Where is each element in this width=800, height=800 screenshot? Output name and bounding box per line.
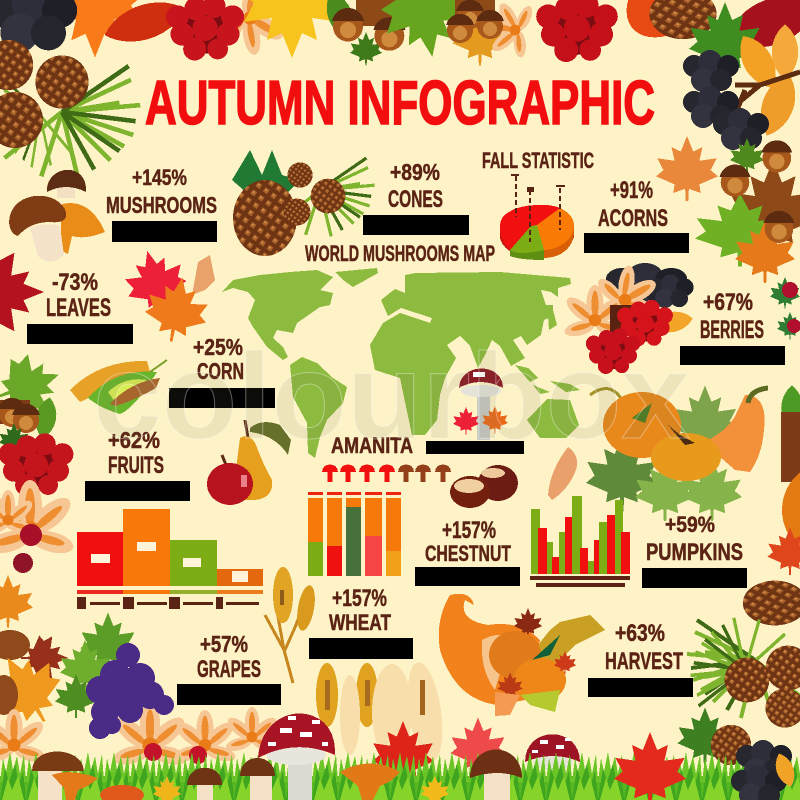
mushrooms stat: +145% — [132, 165, 187, 190]
icon: maple leaf — [614, 732, 686, 800]
icon: orange leaf — [0, 640, 75, 739]
icon: pale leaves — [0, 480, 76, 573]
leaves stat — [27, 269, 133, 344]
harvest stat — [588, 620, 693, 697]
harvest stat: +63% — [615, 620, 665, 647]
icon: mushroom — [240, 758, 275, 800]
mushroom pictogram row — [322, 464, 451, 482]
icon: pear and apple — [207, 420, 291, 505]
world map — [222, 268, 580, 458]
icon: pine cones with needles — [232, 150, 374, 256]
icon: dark green leaf — [730, 138, 764, 174]
icon: acorns — [446, 0, 504, 43]
icon: chanterelle — [340, 764, 400, 800]
icon: green leaf — [689, 2, 761, 78]
cones stat: CONES — [388, 186, 443, 213]
cones stat: +89% — [390, 159, 440, 185]
fall statistic heading: FALL STATISTIC — [482, 148, 594, 173]
border: left cluster — [0, 40, 140, 765]
harvest stat: HARVEST — [605, 648, 683, 675]
icon: wheat — [265, 567, 318, 683]
chestnut stat: CHESTNUT — [425, 541, 511, 566]
leaves stat: LEAVES — [46, 294, 111, 322]
wheat stat: +157% — [332, 585, 387, 612]
icon: chestnuts — [450, 465, 518, 508]
icon: green leaf — [781, 386, 800, 430]
leaves stat: -73% — [52, 269, 98, 296]
icon: red leaf — [99, 0, 191, 52]
icon: acorn — [0, 675, 18, 715]
icon: orange leaf — [0, 575, 33, 628]
icon: red berries — [0, 433, 73, 496]
mushrooms stat — [106, 165, 217, 242]
wheat stat: WHEAT — [329, 610, 391, 635]
icon: pine cones — [725, 646, 800, 728]
icon: red leaf — [0, 251, 44, 333]
chestnut stat: +157% — [442, 517, 496, 544]
icon: red leaf — [768, 528, 800, 575]
icon: autumn leaves — [118, 243, 215, 347]
icon: yellow leaf — [421, 776, 449, 800]
icon: cornucopia — [439, 594, 605, 716]
border: bottom meadow — [0, 660, 800, 800]
acorns stat — [584, 177, 689, 253]
icon: black berries — [683, 50, 769, 150]
icon: dark red leaf — [21, 636, 68, 680]
icon: black berries — [731, 740, 792, 800]
border: top garland — [0, 0, 800, 78]
icon: orange leaves — [452, 7, 508, 65]
icon: yellow maple leaf — [242, 0, 342, 58]
wheat stat — [309, 585, 413, 659]
icon: pine needles — [687, 620, 800, 718]
icon: pine cone — [711, 725, 751, 765]
icon: green leaf — [0, 345, 70, 426]
fruits stat — [85, 427, 190, 501]
world map heading: WORLD MUSHROOMS MAP — [305, 241, 495, 266]
acorns stat: ACORNS — [598, 205, 668, 232]
icon: acorns — [332, 0, 406, 51]
corn stat — [169, 334, 275, 408]
icon: chanterelle — [52, 772, 98, 800]
icon: pine needles — [5, 66, 140, 179]
grapes stat: GRAPES — [197, 656, 261, 683]
icon: rowan berries and leaves — [563, 254, 694, 374]
icon: amanita mushroom with leaves — [453, 368, 508, 440]
icon: pine needles — [691, 618, 785, 706]
icon: dark red leaf — [720, 0, 800, 60]
icon: dark leaf — [0, 423, 29, 454]
berries stat — [680, 289, 785, 365]
icon: red leaf — [100, 785, 144, 800]
watermark: colourbox — [93, 328, 690, 464]
icon: acorn — [0, 630, 30, 660]
icon: orange leaf — [47, 0, 142, 58]
fruits stat: FRUITS — [108, 452, 164, 479]
berries stat: +67% — [703, 289, 753, 316]
icon: yellow leaf — [772, 24, 798, 80]
icon: branch — [720, 72, 800, 118]
icon: rowan berries — [166, 0, 244, 61]
chestnut stat — [415, 517, 520, 586]
icon: blurred red leaf — [450, 718, 506, 775]
icon: orange flower leaf — [656, 136, 718, 201]
icon: amanita mushroom — [258, 713, 335, 800]
icon: acorns — [0, 398, 40, 433]
corn stat: CORN — [197, 358, 244, 384]
icon: pale leaf — [481, 0, 536, 60]
acorns stat: +91% — [610, 177, 653, 204]
icon: wheat field — [316, 660, 448, 764]
icon: orange leaf — [771, 751, 799, 789]
icon: orange leaves — [731, 29, 785, 95]
icon: mushroom — [470, 750, 522, 800]
icon: pale leaf — [215, 0, 300, 67]
icon: green leaf — [678, 708, 732, 765]
icon: orange leaf — [752, 69, 800, 141]
icon: pale leaf — [0, 709, 47, 765]
icon: red berries — [536, 0, 618, 62]
icon: red-orange leaf — [615, 0, 681, 49]
pumpkins stat — [642, 512, 747, 588]
border: right cluster — [656, 24, 800, 765]
bar chart — [77, 509, 263, 609]
icon: pale leaves — [111, 702, 280, 768]
icon: green leaf — [320, 0, 360, 43]
amanita stat — [331, 433, 524, 458]
icon: red leaf — [372, 721, 434, 786]
icon: grapes — [55, 612, 174, 739]
corn stat: +25% — [193, 334, 243, 360]
icon: mushroom — [187, 768, 222, 800]
icon: green leaf — [375, 0, 474, 64]
mushrooms stat: MUSHROOMS — [106, 192, 217, 218]
icon: mushrooms — [9, 170, 105, 262]
fruits stat: +62% — [108, 427, 160, 453]
icon: pine cones — [0, 40, 89, 148]
chart legend — [77, 597, 259, 609]
icon: pine cone — [743, 581, 800, 625]
icon: holly berries — [770, 277, 800, 339]
pumpkins stat: +59% — [665, 512, 715, 537]
pumpkins stat: PUMPKINS — [646, 539, 743, 566]
icon: blurred leaf — [548, 447, 577, 500]
icon: black berries — [0, 0, 77, 52]
grass — [0, 752, 800, 800]
icon: brown basket — [781, 412, 800, 482]
stacked bar chart — [308, 492, 401, 576]
icon: orange leaf — [735, 220, 795, 283]
icon: pine needles — [0, 79, 70, 167]
icon: green leaf — [32, 396, 60, 440]
icon: mushroom — [32, 752, 84, 800]
icon: dark leaf — [350, 32, 382, 66]
icon: acorns — [720, 140, 794, 243]
grapes stat: +57% — [200, 631, 248, 657]
icon: green leaf — [695, 193, 785, 266]
icon: orange leaf — [782, 472, 800, 548]
grapes stat — [177, 631, 281, 705]
icon: amanita mushroom — [525, 734, 580, 770]
cones stat — [363, 159, 469, 235]
icon: brown leaves — [728, 160, 800, 254]
icon: corn — [70, 360, 167, 414]
icon: yellow leaf — [153, 776, 181, 800]
icon: pine cone — [649, 0, 717, 39]
grouped bar chart — [530, 496, 630, 587]
icon: pumpkins and leaves — [586, 386, 768, 521]
pie chart — [500, 174, 574, 260]
amanita stat: AMANITA — [331, 433, 413, 458]
